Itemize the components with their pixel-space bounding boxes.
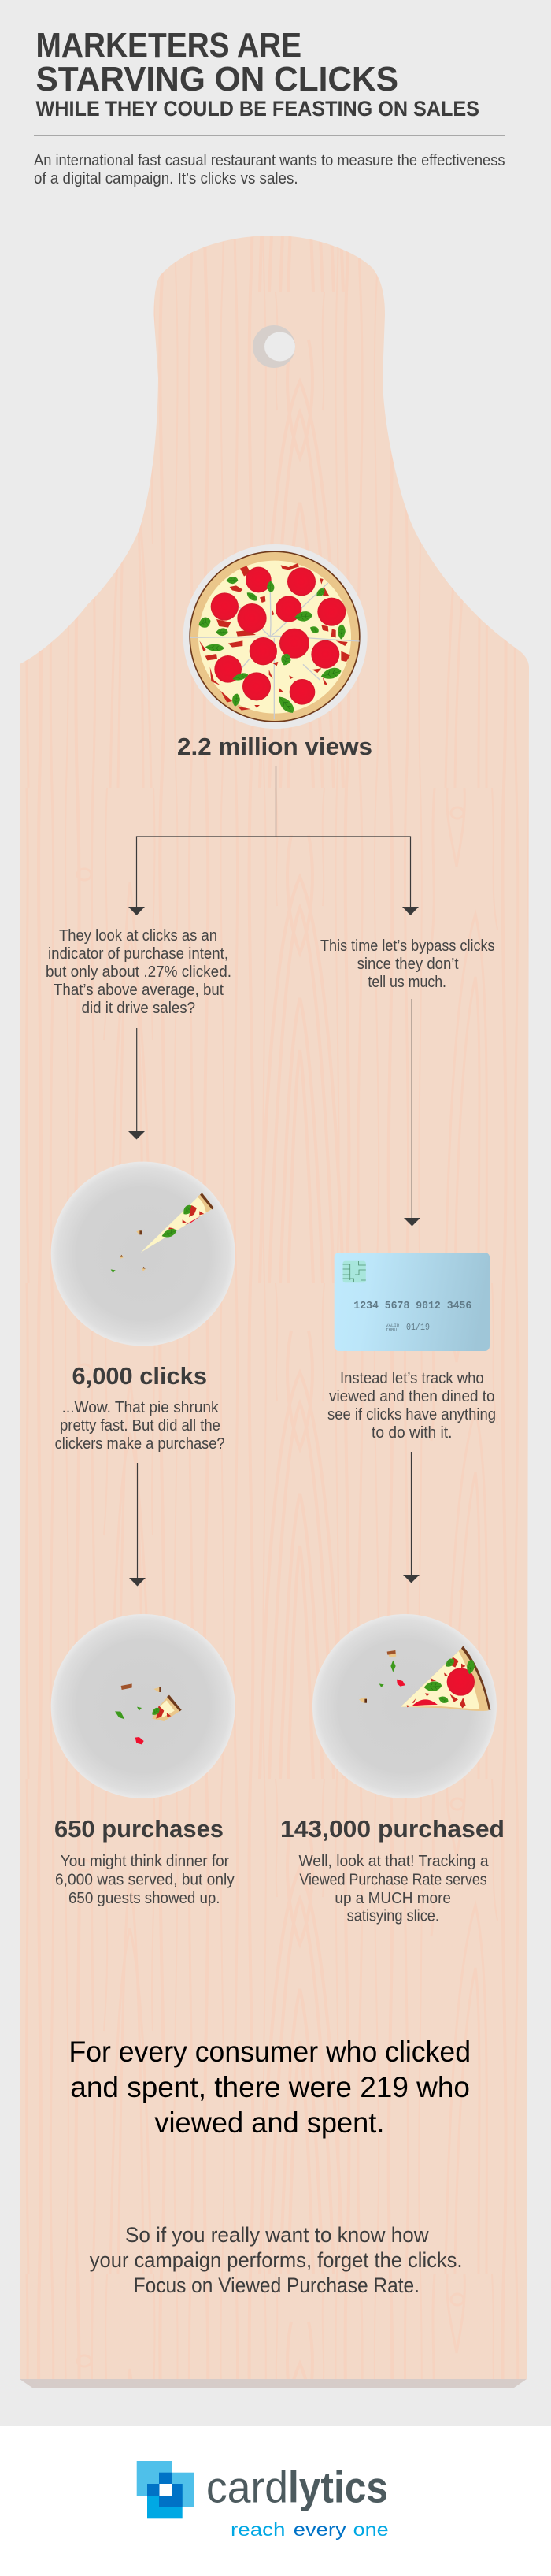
text: clicks outcome	[55, 1853, 235, 1907]
text: bypass clicks intro: since they don’t	[357, 956, 459, 973]
text: track viewers: Instead let’s track who	[340, 1370, 484, 1387]
callout: 219 viewers statistic: and spent, there were 219 who	[70, 2071, 470, 2103]
text: bypass clicks intro: This time let’s bypass clicks	[320, 937, 495, 955]
icon: credit card: 01/19	[406, 1322, 430, 1333]
text: clicks path intro: That’s above average, but	[54, 982, 224, 999]
callout: 219 viewers statistic: For every consumer who clicked	[69, 2036, 471, 2068]
text: clicks result: pretty fast. But did all the	[60, 1417, 220, 1435]
text: clicks result	[55, 1399, 225, 1453]
icon: plate with large slice	[312, 1614, 497, 1798]
text: bypass clicks intro: tell us much.	[368, 974, 446, 991]
arrow: left to purchases plate	[129, 1463, 146, 1587]
icon: credit card	[335, 1253, 490, 1351]
icon: plate with tiny slice	[51, 1614, 235, 1798]
text: clicks outcome: 6,000 was served, but only	[55, 1872, 235, 1889]
icon: cardlytics logo mark	[137, 2461, 194, 2518]
tagline: reach every one	[231, 2519, 389, 2540]
heading: 6,000 clicks: 6,000 clicks	[72, 1362, 207, 1390]
arrow: left to clicks plate	[128, 1028, 145, 1139]
text: conclusion: So if you really want to know how	[125, 2223, 429, 2247]
text: bypass clicks intro	[320, 937, 495, 991]
arrow: right to purchased plate	[403, 1452, 420, 1583]
text: clicks path intro: indicator of purchase intent,	[48, 945, 228, 963]
text: viewed outcome: up a MUCH more	[335, 1890, 451, 1907]
text: clicks path intro: did it drive sales?	[82, 1000, 195, 1017]
text: clicks path intro: They look at clicks as an	[59, 927, 217, 945]
icon: whole pizza on plate	[183, 544, 368, 729]
text: track viewers	[327, 1370, 496, 1442]
text: track viewers: see if clicks have anything	[327, 1406, 496, 1423]
title: STARVING ON CLICKS	[36, 60, 398, 98]
panel: footer	[0, 2426, 551, 2576]
text: track viewers: to do with it.	[372, 1424, 452, 1442]
text: viewed outcome: satisying slice.	[347, 1908, 439, 1925]
title	[36, 26, 479, 121]
text: viewed outcome: Viewed Purchase Rate serves	[299, 1872, 487, 1889]
text: clicks result: clickers make a purchase?	[55, 1435, 225, 1453]
text: clicks result: ...Wow. That pie shrunk	[62, 1399, 220, 1416]
heading: 650 purchases: 650 purchases	[54, 1815, 224, 1843]
arrow: split into two paths	[128, 766, 419, 915]
text: clicks outcome: 650 guests showed up.	[68, 1890, 220, 1907]
icon: credit card: VALID	[386, 1323, 399, 1328]
icon: plate with thin slice	[51, 1162, 235, 1346]
text: track viewers: viewed and then dined to	[329, 1388, 495, 1405]
text: clicks path intro: but only about .27% clicked.	[46, 963, 231, 981]
arrow: right to card	[404, 999, 420, 1226]
logo wordmark: cardlytics: card	[206, 2463, 288, 2512]
logo wordmark: cardlytics	[206, 2463, 388, 2512]
tagline: reach every one: one	[353, 2519, 389, 2540]
text: viewed outcome	[299, 1853, 489, 1925]
intro text: An international fast casual restaurant wants to measure the effectiveness	[34, 152, 505, 169]
panel: cutting board	[20, 236, 529, 2388]
text: conclusion: Focus on Viewed Purchase Rate.	[134, 2273, 420, 2297]
title: MARKETERS ARE	[36, 26, 301, 65]
text: conclusion: your campaign performs, forget the clicks.	[90, 2248, 463, 2272]
text: viewed outcome: Well, look at that! Tracking a	[299, 1853, 489, 1870]
callout: 219 viewers statistic	[69, 2036, 471, 2139]
intro text: of a digital campaign. It’s clicks vs sales.	[34, 170, 298, 187]
callout: 219 viewers statistic: viewed and spent.	[154, 2106, 384, 2139]
tagline: reach every one: reach	[231, 2519, 285, 2540]
text: clicks outcome: You might think dinner for	[61, 1853, 229, 1870]
icon: credit card: THRU	[386, 1328, 397, 1333]
icon: card chip	[343, 1261, 366, 1282]
text: clicks path intro	[46, 927, 231, 1017]
icon: board hanging hole	[253, 325, 295, 368]
tagline: reach every one: every	[294, 2519, 346, 2540]
intro text	[34, 152, 505, 187]
icon: credit card: 1234 5678 9012 3456	[353, 1300, 471, 1312]
title: WHILE THEY COULD BE FEASTING ON SALES	[36, 97, 479, 121]
heading: 143,000 purchased: 143,000 purchased	[280, 1815, 505, 1843]
heading: 2.2 million views: 2.2 million views	[177, 733, 372, 760]
logo wordmark: cardlytics: lytics	[288, 2463, 388, 2512]
text: conclusion	[90, 2223, 463, 2297]
